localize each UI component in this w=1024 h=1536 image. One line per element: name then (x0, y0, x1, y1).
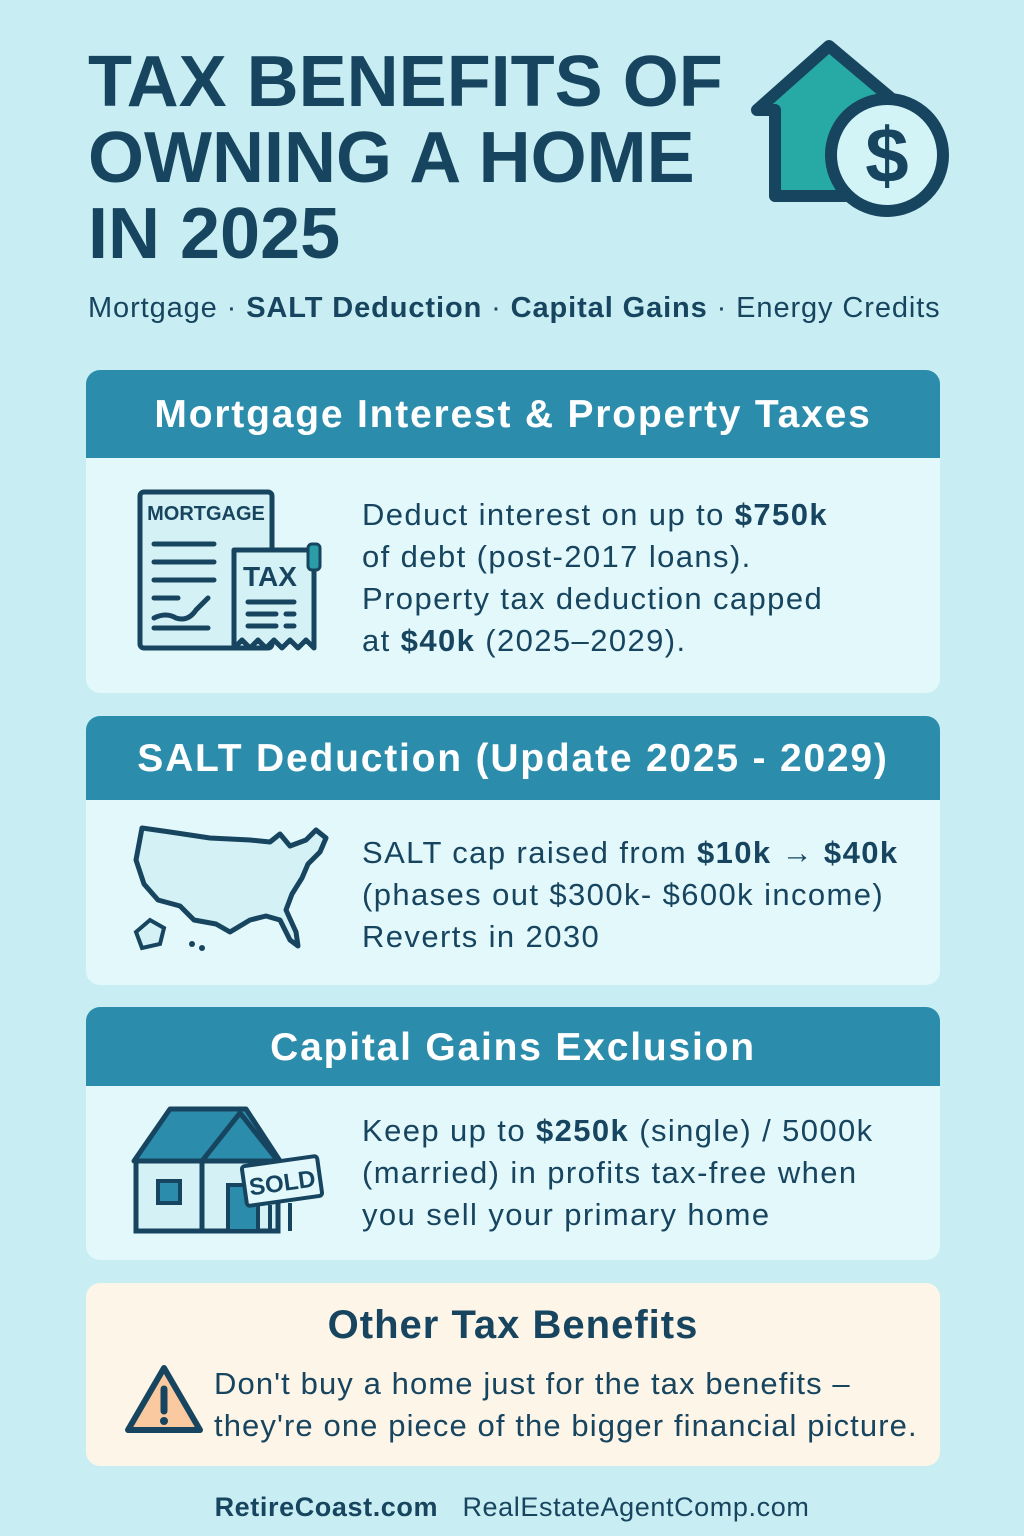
icon: house with dollar: $ (865, 111, 909, 199)
text: warning: they're one piece of the bigger financial picture. (214, 1408, 918, 1443)
heading: SALT (86, 716, 940, 800)
icon: mortgage document: MORTGAGE (147, 503, 265, 525)
text: mortgage: Property tax deduction capped (362, 581, 823, 616)
text: capital gains: Keep up to $250k (single) / 5000k (362, 1113, 874, 1148)
icon: house with dollar (751, 40, 949, 217)
text: SALT: (phases out $300k- $600k income) (362, 877, 884, 912)
text: warning (214, 1366, 918, 1443)
text: SALT: Reverts in 2030 (362, 919, 600, 954)
icon: sold house: SOLD (247, 1165, 317, 1201)
title: OWNING A HOME (88, 118, 695, 198)
footer: RetireCoast.com RealEstateAgentComp.com (215, 1492, 809, 1522)
icon: warning (125, 1365, 203, 1433)
panel: mortgage (86, 370, 940, 693)
text: mortgage: of debt (post-2017 loans). (362, 539, 752, 574)
panel: other benefits (86, 1283, 940, 1466)
icon: mortgage document: TAX (243, 561, 297, 592)
title: IN 2025 (88, 194, 340, 274)
icon: mortgage document (138, 490, 322, 650)
heading: SALT: SALT Deduction (Update 2025 - 2029) (137, 737, 889, 780)
text: warning: Don't buy a home just for the tax benefits – (214, 1366, 851, 1401)
panel: capital gains (86, 1007, 940, 1260)
text: capital gains: you sell your primary home (362, 1197, 771, 1232)
text: mortgage (362, 497, 828, 658)
title: TAX BENEFITS OF (88, 42, 723, 122)
subtitle: Mortgage · SALT Deduction · Capital Gains · Energy Credits (88, 292, 941, 324)
heading: mortgage: Mortgage Interest & Property Taxes (154, 393, 872, 436)
heading: capital gains (86, 1007, 940, 1086)
text: capital gains (362, 1113, 874, 1232)
text: capital gains: (married) in profits tax-free when (362, 1155, 858, 1190)
icon: sold house (132, 1106, 324, 1234)
heading: mortgage (86, 370, 940, 458)
panel: SALT (86, 716, 940, 985)
text: SALT: SALT cap raised from $10k → $40k (362, 835, 898, 870)
heading: capital gains: Capital Gains Exclusion (270, 1026, 756, 1069)
icon: US map (134, 826, 328, 951)
text: mortgage: Deduct interest on up to $750k (362, 497, 828, 532)
text: SALT (362, 835, 898, 954)
text: mortgage: at $40k (2025–2029). (362, 623, 686, 658)
heading: other benefits: Other Tax Benefits (328, 1303, 698, 1347)
title (88, 42, 723, 274)
